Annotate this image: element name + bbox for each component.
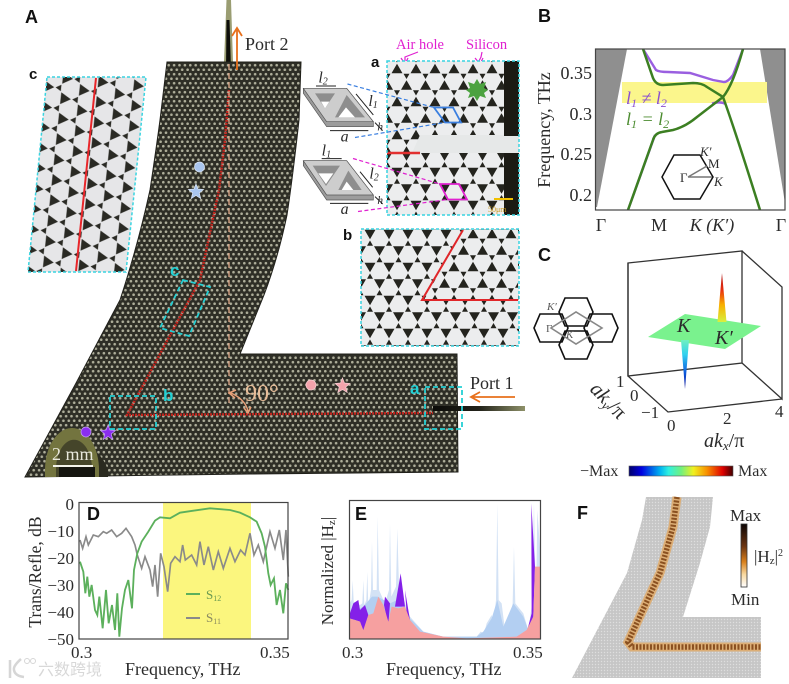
air hole and silicon labels [396,37,508,64]
band legend labels [626,88,669,131]
band legend labels: 2 [661,96,667,110]
unit cell diagram with l2 greater: a [341,201,349,218]
field colour scale: z [770,555,775,567]
band legend labels: 2 [663,117,669,131]
unit cell diagram with l2 greater: 1 [326,149,331,160]
colour scale [580,463,767,480]
panel E: normalized field [318,500,543,679]
D y ticks: −50 [47,630,74,649]
E x ticks: 0.3 [342,643,363,662]
port 2 arrow and label [232,28,289,70]
band legend labels: 1 [631,117,637,131]
green bands for equal l [628,49,760,210]
x axis labels: Γ [596,215,606,235]
purple circle and star markers [81,425,116,440]
D y ticks: −40 [47,603,74,622]
K and K prime labels [676,315,733,349]
3D box frame [628,251,782,412]
unit cell diagram with l1 greater: l [318,70,323,87]
blue circle and star markers [188,162,204,198]
D y ticks [47,495,74,649]
unit cell diagram with l2 greater: h [377,195,383,207]
x axis labels [596,215,786,236]
region c dashed box [160,261,210,336]
90 degree annotation [229,381,279,413]
ky ticks: 1 [616,372,624,391]
y axis ticks: 0.3 [570,104,592,124]
kx axis label: x [722,438,729,453]
ky axis label: y [597,397,613,413]
D legend: 11 [213,617,221,626]
x axis labels: Γ [776,215,786,235]
kx axis label: ak [704,430,723,452]
scale ring with 2 mm bar: 2 mm [52,444,94,464]
region b dashed box [110,386,173,429]
heading A: A [25,7,38,27]
E x ticks [342,643,543,662]
D x ticks [71,643,290,662]
D y ticks: −30 [47,576,74,595]
hexagonal lattice inset [534,298,618,359]
y axis ticks: 0.25 [560,144,592,164]
unit cell diagram with l1 greater [303,70,383,146]
port 1 fibre [433,406,525,411]
D legend: 12 [213,594,221,603]
ky ticks [616,372,659,422]
ky axis label: ak [585,377,616,408]
straight reference path [228,64,230,403]
panel F: simulated field map [572,497,783,678]
D x ticks: 0.35 [260,643,290,662]
field colour scale: Min [731,590,760,609]
purple bands for unequal l [628,49,743,210]
kx axis label: /π [729,430,744,452]
unit cell diagram with l1 greater: h [377,122,383,134]
positive peak at K prime [718,273,726,322]
y axis ticks: 0.35 [560,63,592,83]
blue and magenta unit cell outlines [434,108,467,200]
E y axis label: z [326,520,338,525]
band legend labels: l [626,109,631,129]
green Berry plane [648,314,761,349]
y axis ticks [560,63,592,205]
band legend labels: 1 [631,96,637,110]
x axis labels: M [651,215,667,235]
D legend: S [206,587,213,602]
unit cell diagram with l2 greater: l [369,165,374,182]
E spectra [349,503,541,639]
inset b: corner micrograph: b [343,227,352,244]
field waveguide [628,497,761,647]
brillouin zone hexagon [662,144,724,199]
y axis label: Frequency, THz [534,72,554,188]
dashed callout lines from unit cells [348,84,448,212]
inset b: corner micrograph [343,227,519,346]
D legend: S [206,610,213,625]
field colour scale: 2 [778,548,783,559]
band legend labels: = l [637,109,663,129]
yellow bandgap strip [622,82,767,103]
D y ticks: −20 [47,549,74,568]
unit cell diagram with l2 greater: l [322,142,326,159]
pink circle and star markers [306,378,350,392]
hexagonal lattice inset: Γ [546,323,552,335]
unit cell diagram with l1 greater: a [341,129,349,146]
D y ticks: 0 [66,495,74,514]
heading D: D [87,504,100,524]
kx ticks [667,402,784,435]
kx ticks: 4 [775,402,784,421]
scale bar [488,198,513,214]
unit cell diagram with l2 greater [303,142,383,218]
D plot frame [79,502,288,639]
band legend labels: ≠ l [637,88,661,108]
scale ring with 2 mm bar [45,428,108,477]
heading F: F [577,503,588,523]
colour scale: Max [738,463,767,480]
negative peak at K [681,340,689,389]
ky ticks: 0 [630,386,638,405]
silicon star marker [466,79,488,101]
field colour scale: Max [730,506,762,525]
unit cell diagram with l1 greater: 1 [373,100,378,111]
kx ticks: 2 [723,409,732,428]
D y axis label: Trans/Refle, dB [25,516,45,628]
port 2 fibre [224,0,233,70]
inset c: bent waveguide micrograph [28,66,146,272]
E x axis label: Frequency, THz [386,659,501,679]
scale bar: 50μm [488,205,507,214]
inset c: bent waveguide micrograph: c [29,66,37,83]
air hole and silicon labels: Air hole [396,37,444,53]
region b dashed box: b [163,386,173,405]
heading B: B [538,6,551,26]
ky axis label: /π [603,395,632,424]
port 1 arrow and label: Port 1 [470,373,514,393]
heading E: E [355,504,367,524]
plot frame [596,49,785,210]
panel C: Berry curvature [534,245,784,480]
inset a: straight edge micrograph: a [371,54,380,71]
L-shaped silicon chip [25,62,458,477]
E x ticks: 0.35 [513,643,543,662]
grey device outline [572,497,761,678]
brillouin zone hexagon: M [708,156,720,171]
brillouin zone hexagon: Γ [680,170,688,185]
K and K prime labels: K [676,315,692,337]
watermark [10,658,102,679]
E y axis label: Normalized |H [318,525,337,625]
D x ticks: 0.3 [71,643,92,662]
unit cell diagram with l1 greater: l [368,93,373,110]
grey light cones [596,49,785,207]
brillouin zone hexagon: K′ [699,144,712,159]
band legend labels: l [626,88,631,108]
panel A: waveguide device overview [25,0,525,477]
ky ticks: −1 [641,403,659,422]
panel B: band diagram [534,6,786,236]
watermark: 六数跨境 [38,660,102,679]
port 1 arrow and label [470,373,515,402]
red waveguide path [127,90,433,415]
E plot frame [350,500,540,639]
heading C: C [538,245,551,265]
x axis labels: K (K′) [689,215,734,236]
y axis ticks: 0.2 [570,185,592,205]
K and K prime labels: K′ [714,327,733,349]
port 2 arrow and label: Port 2 [245,34,289,54]
field colour scale: |H [754,547,770,566]
D legend [186,587,221,626]
D x axis label: Frequency, THz [125,659,240,679]
field colour scale [730,506,783,609]
unit cell diagram with l2 greater: 2 [374,172,379,183]
S12 green curve [80,508,288,637]
brillouin zone hexagon: K [713,174,724,189]
air hole and silicon labels: Silicon [466,37,508,53]
90 degree annotation: 90° [245,381,279,407]
region c dashed box: c [170,261,179,280]
hexagonal lattice inset: K′ [546,301,557,313]
colour scale: −Max [580,463,618,480]
kx ticks: 0 [667,416,676,435]
unit cell diagram with l1 greater: 2 [323,77,328,88]
yellow bandgap region [163,503,251,639]
region a dashed box: a [410,379,420,398]
S11 grey curve [80,528,288,597]
field colour scale: | [775,547,778,566]
inset a: straight edge micrograph [371,37,519,215]
region a dashed box [410,379,462,429]
panel D: transmission and reflection [25,495,290,679]
hexagonal lattice inset: K [565,329,574,341]
D y ticks: −10 [47,522,74,541]
E y axis label: | [318,517,337,520]
